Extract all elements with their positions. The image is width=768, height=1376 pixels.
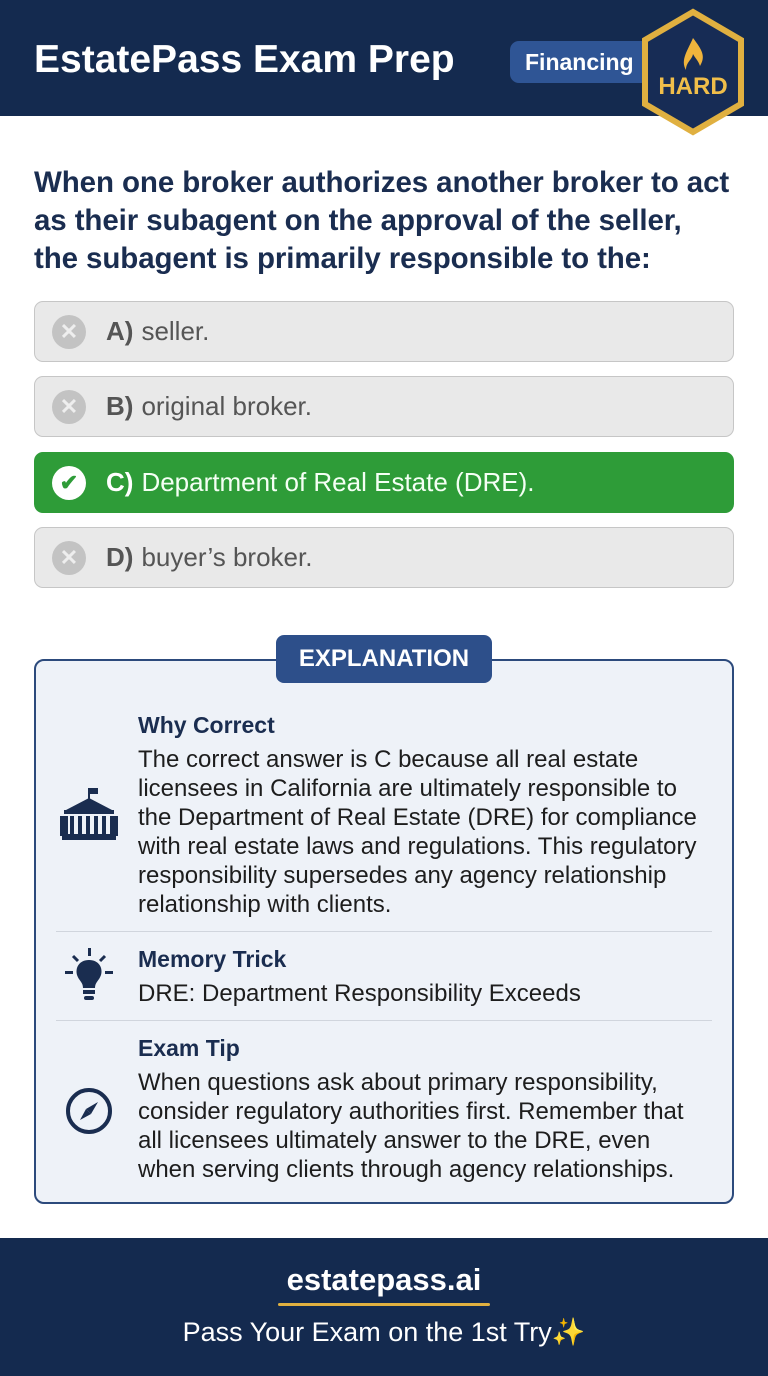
section: why correct — [138, 712, 697, 918]
section: why correct: relationship with clients. — [138, 891, 391, 918]
icon: compass — [66, 1088, 112, 1134]
footer — [0, 1238, 768, 1376]
option D: ✕ — [60, 544, 78, 570]
section: exam tip: all licensees ultimately answer to the DRE, even — [138, 1127, 650, 1154]
tagline: Pass Your Exam on the 1st Try✨ — [183, 1317, 585, 1347]
question: the subagent is primarily responsible to the: — [34, 242, 651, 275]
section: exam tip: when serving clients through agency relationships. — [138, 1156, 674, 1183]
explanation label: EXPLANATION — [299, 645, 469, 672]
section: why correct: with real estate laws and regulations. This regulatory — [138, 833, 697, 860]
brand: estatepass.ai — [287, 1262, 481, 1297]
option B: original broker. — [141, 391, 312, 421]
option C correct: ✔ — [60, 470, 78, 494]
question — [34, 166, 729, 275]
section: memory trick — [138, 946, 581, 1007]
option B — [34, 376, 734, 437]
section: why correct: responsibility supersedes any agency relationship — [138, 862, 666, 889]
icon: building — [60, 788, 118, 840]
question: When one broker authorizes another broker to act — [34, 166, 729, 199]
section: why correct: licensees in California are ultimately responsible to — [138, 775, 677, 802]
section: exam tip: When questions ask about primary responsibility, — [138, 1069, 658, 1096]
option A: ✕ — [60, 318, 78, 344]
option A: seller. — [141, 316, 209, 346]
option A: A) — [106, 316, 133, 346]
section: why correct: Why Correct — [138, 712, 275, 738]
explanation label — [276, 635, 492, 683]
explanation panel — [34, 659, 734, 1204]
difficulty badge — [642, 8, 744, 136]
section: memory trick: Memory Trick — [138, 946, 286, 972]
section: exam tip: consider regulatory authorities first. Remember that — [138, 1098, 684, 1125]
option B: B) — [106, 391, 133, 421]
option D: buyer’s broker. — [141, 542, 312, 572]
title: EstatePass Exam Prep — [34, 38, 455, 81]
option C correct: C) — [106, 467, 133, 497]
section: why correct: the Department of Real Estate (DRE) for compliance — [138, 804, 697, 831]
difficulty badge: HARD — [658, 73, 728, 100]
category pill: Financing — [525, 49, 634, 75]
option C correct — [34, 452, 734, 513]
section: exam tip: Exam Tip — [138, 1035, 240, 1061]
header — [0, 0, 768, 116]
option D — [34, 527, 734, 588]
section: why correct: The correct answer is C because all real estate — [138, 746, 638, 773]
section: exam tip — [138, 1035, 684, 1183]
option A — [34, 301, 734, 362]
option C correct: Department of Real Estate (DRE). — [141, 467, 534, 497]
question: as their subagent on the approval of the seller, — [34, 204, 682, 237]
section: memory trick: DRE: Department Responsibility Exceeds — [138, 980, 581, 1007]
option B: ✕ — [60, 394, 78, 418]
option D: D) — [106, 542, 133, 572]
icon: lightbulb — [65, 948, 113, 1000]
category pill — [510, 41, 650, 83]
